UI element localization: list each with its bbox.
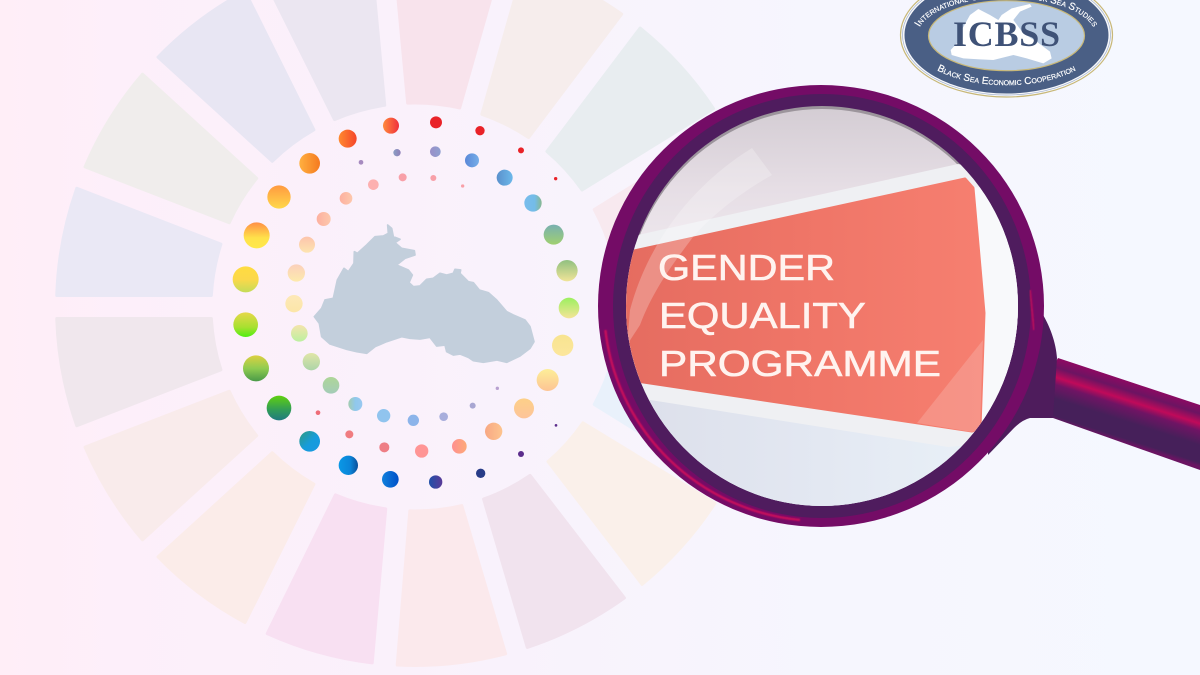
middle dot ring [316, 146, 579, 458]
title: Gender Equality Programme: GENDER [658, 247, 835, 288]
white band around the red segment [620, 164, 1030, 447]
wheel of 17 pale segments [53, 0, 773, 669]
red segment [620, 179, 984, 431]
icon: magnifier handle [1045, 358, 1200, 470]
title: Gender Equality Programme: PROGRAMME [659, 343, 941, 384]
logo lettering: ICBSS: ICBSS [953, 14, 1060, 54]
outer dot ring [233, 116, 557, 489]
logo map: white Black Sea shape [951, 4, 1052, 63]
magnifying glass [598, 85, 1200, 527]
lens crescent highlight [627, 148, 772, 345]
right lens highlight [974, 187, 1018, 424]
logo: ICBSS badge [900, 0, 1114, 98]
lower lens tint [648, 400, 962, 506]
inner dot ring [285, 173, 499, 426]
central emblem: dots and Black Sea map [233, 116, 579, 489]
icon: magnifier ferrule [988, 300, 1057, 455]
lens highlight on red segment [917, 340, 983, 432]
magnifier rim [598, 85, 1044, 527]
title: Gender Equality Programme: EQUALITY [659, 295, 866, 336]
logo ring text: Black Sea Economic Cooperation: Black Sea Economic Cooperation [938, 64, 1076, 86]
magnifier lens [620, 100, 1030, 520]
map: Black Sea silhouette [314, 225, 534, 362]
